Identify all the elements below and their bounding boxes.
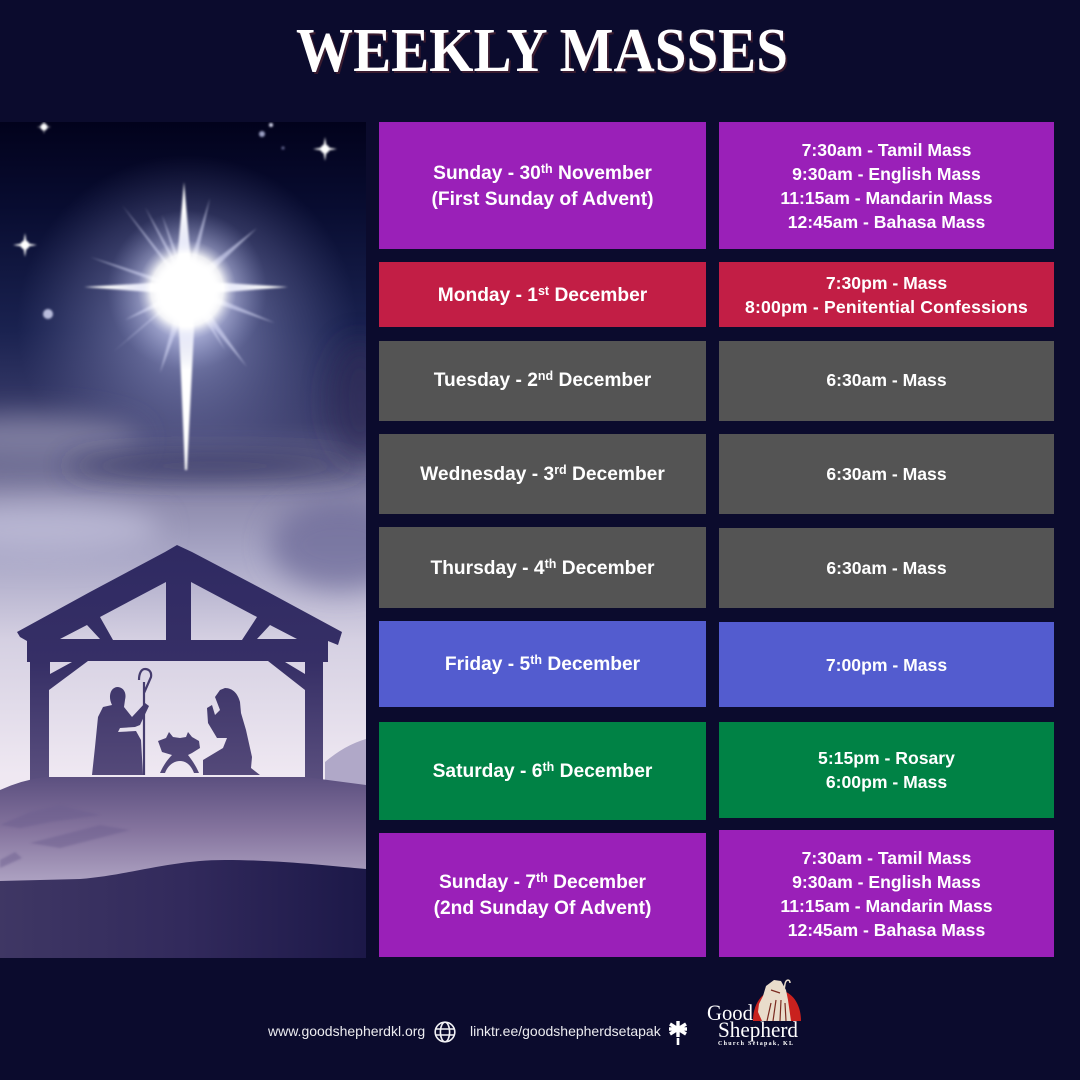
row: Friday date bbox=[379, 621, 706, 707]
row: Tuesday times bbox=[719, 341, 1054, 421]
row: Tuesday times: 6:30am - Mass bbox=[826, 370, 947, 390]
row: Friday times: 7:00pm - Mass bbox=[826, 654, 947, 674]
row: Thursday date: Thursday - 4th December bbox=[430, 556, 655, 578]
row: Saturday date bbox=[379, 722, 706, 820]
row: Monday times: 7:30pm - Mass bbox=[826, 272, 947, 292]
row: Thursday times: 6:30am - Mass bbox=[826, 558, 947, 578]
star glow bbox=[17, 155, 357, 495]
clouds bbox=[0, 340, 410, 590]
row: Friday times bbox=[719, 622, 1054, 707]
manger with baby bbox=[158, 732, 200, 773]
row: Sunday 30 November times: 9:30am - English Mass bbox=[792, 164, 981, 184]
small stars bbox=[13, 120, 337, 319]
row: Sunday 7 December date bbox=[379, 833, 706, 957]
row: Sunday 30 November date: Sunday - 30th November bbox=[433, 162, 652, 184]
logo emblem bbox=[753, 980, 801, 1021]
shepherd crook bbox=[139, 669, 151, 775]
row: Thursday times bbox=[719, 528, 1054, 608]
snow shadows bbox=[0, 805, 130, 868]
row: Sunday 30 November date bbox=[379, 122, 706, 249]
row: Sunday 30 November times: 12:45am - Bahasa Mass bbox=[788, 212, 985, 232]
star rays bbox=[84, 182, 288, 470]
star core bbox=[107, 210, 267, 370]
row: Saturday times: 6:00pm - Mass bbox=[826, 772, 947, 792]
footer: linktree: linktr.ee/goodshepherdsetapak bbox=[470, 1023, 661, 1039]
logo wordmark: Good bbox=[707, 1000, 753, 1025]
row: Wednesday date: Wednesday - 3rd December bbox=[420, 463, 665, 485]
row: Sunday 30 November times bbox=[719, 122, 1054, 249]
row: Sunday 7 December times: 9:30am - English Mass bbox=[792, 872, 981, 892]
illustration: nativity scene under the star bbox=[0, 122, 366, 958]
hill bbox=[0, 777, 366, 885]
row: Thursday date bbox=[379, 527, 706, 608]
row: Wednesday date bbox=[379, 434, 706, 514]
row: Tuesday date bbox=[379, 341, 706, 421]
logo wordmark bbox=[707, 1000, 798, 1047]
row: Tuesday date: Tuesday - 2nd December bbox=[434, 369, 651, 391]
icon: globe bbox=[434, 1021, 456, 1043]
row: Monday times bbox=[719, 262, 1054, 327]
row: Sunday 7 December times: 12:45am - Bahasa Mass bbox=[788, 920, 985, 940]
row: Monday times: 8:00pm - Penitential Confessions bbox=[745, 296, 1028, 316]
logo: Good Shepherd Church bbox=[707, 979, 801, 1047]
row: Sunday 30 November date: (First Sunday of Advent) bbox=[431, 188, 654, 210]
shepherd figure bbox=[92, 687, 149, 775]
distant hill bbox=[325, 739, 366, 790]
stable silhouette bbox=[17, 545, 342, 780]
row: Wednesday times: 6:30am - Mass bbox=[826, 464, 947, 484]
title: WEEKLY MASSES bbox=[296, 17, 788, 85]
foreground dune bbox=[0, 860, 366, 958]
row: Sunday 7 December date: Sunday - 7th December bbox=[439, 871, 646, 893]
sky bbox=[0, 122, 366, 958]
row: Monday date: Monday - 1st December bbox=[438, 284, 647, 306]
row: Sunday 30 November times: 7:30am - Tamil Mass bbox=[802, 140, 971, 160]
row: Saturday date: Saturday - 6th December bbox=[433, 760, 652, 782]
footer: website: www.goodshepherdkl.org bbox=[268, 1023, 425, 1039]
row: Sunday 7 December times: 11:15am - Mandarin Mass bbox=[780, 896, 993, 916]
icon: linktree bbox=[669, 1021, 687, 1045]
row: Wednesday times bbox=[719, 434, 1054, 514]
logo wordmark: Church Setapak, KL bbox=[718, 1041, 793, 1047]
row: Sunday 30 November times: 11:15am - Mandarin Mass bbox=[780, 188, 993, 208]
logo wordmark: Shepherd bbox=[718, 1017, 798, 1042]
row: Sunday 7 December times: 7:30am - Tamil Mass bbox=[802, 848, 971, 868]
kneeling woman bbox=[203, 688, 260, 775]
row: Friday date: Friday - 5th December bbox=[445, 653, 640, 675]
row: Saturday times bbox=[719, 722, 1054, 818]
row: Sunday 7 December times bbox=[719, 830, 1054, 957]
row: Sunday 7 December date: (2nd Sunday Of Advent) bbox=[434, 898, 651, 919]
star cross bbox=[177, 182, 194, 470]
row: Monday date bbox=[379, 262, 706, 327]
row: Saturday times: 5:15pm - Rosary bbox=[818, 748, 955, 768]
holy family bbox=[92, 669, 260, 775]
